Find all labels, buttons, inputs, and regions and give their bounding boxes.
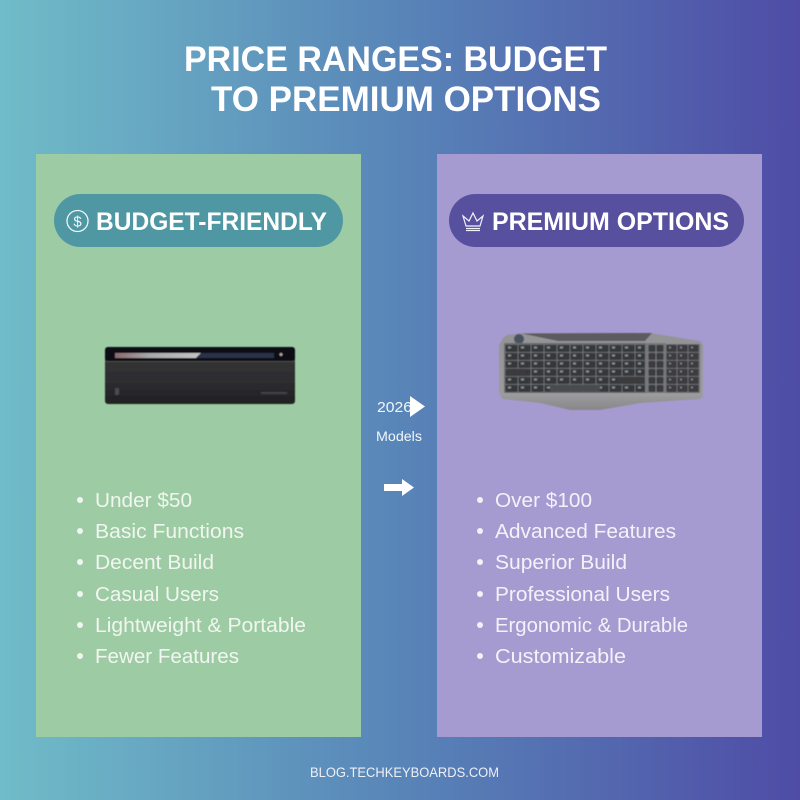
list: premium features: Customizable [495,646,626,668]
arrow: upper [410,396,425,417]
title: TO PREMIUM OPTIONS [211,80,601,119]
list: budget features: Casual Users [95,584,219,606]
list: premium features [477,490,688,668]
list: premium features: Superior Build [495,552,627,574]
list: budget features: Under $50 [95,490,192,512]
icon: crown [463,213,483,230]
footer: BLOG.TECHKEYBOARDS.COM [310,765,499,780]
icon: dollar coin [67,210,88,232]
list: budget features: Lightweight & Portable [95,615,306,637]
list: premium features: Ergonomic & Durable [495,615,688,637]
list: budget features: Decent Build [95,552,214,574]
list: premium features: Professional Users [495,584,670,606]
image: slim black keyboard [105,347,295,404]
panel: premium options [437,154,762,737]
badge: budget-friendly: BUDGET-FRIENDLY [96,208,327,236]
badge: budget-friendly [54,194,343,247]
list: budget features: Basic Functions [95,521,244,543]
label: 2026 models [376,399,422,444]
title: PRICE RANGES: BUDGET [184,40,607,79]
list: budget features [77,490,306,668]
list: premium features: Over $100 [495,490,592,512]
list: budget features: Fewer Features [95,646,239,668]
title [184,40,607,119]
panel: budget-friendly [36,154,361,737]
badge: premium options [449,194,744,247]
image: grey ergonomic keyboard [499,333,703,410]
label: 2026 models: Models [376,428,422,444]
list: premium features: Advanced Features [495,521,676,543]
icon: dollar coin: $ [73,214,82,230]
badge: premium options: PREMIUM OPTIONS [492,208,729,236]
label: 2026 models: 2026 [377,399,412,416]
arrow: lower [384,479,414,496]
